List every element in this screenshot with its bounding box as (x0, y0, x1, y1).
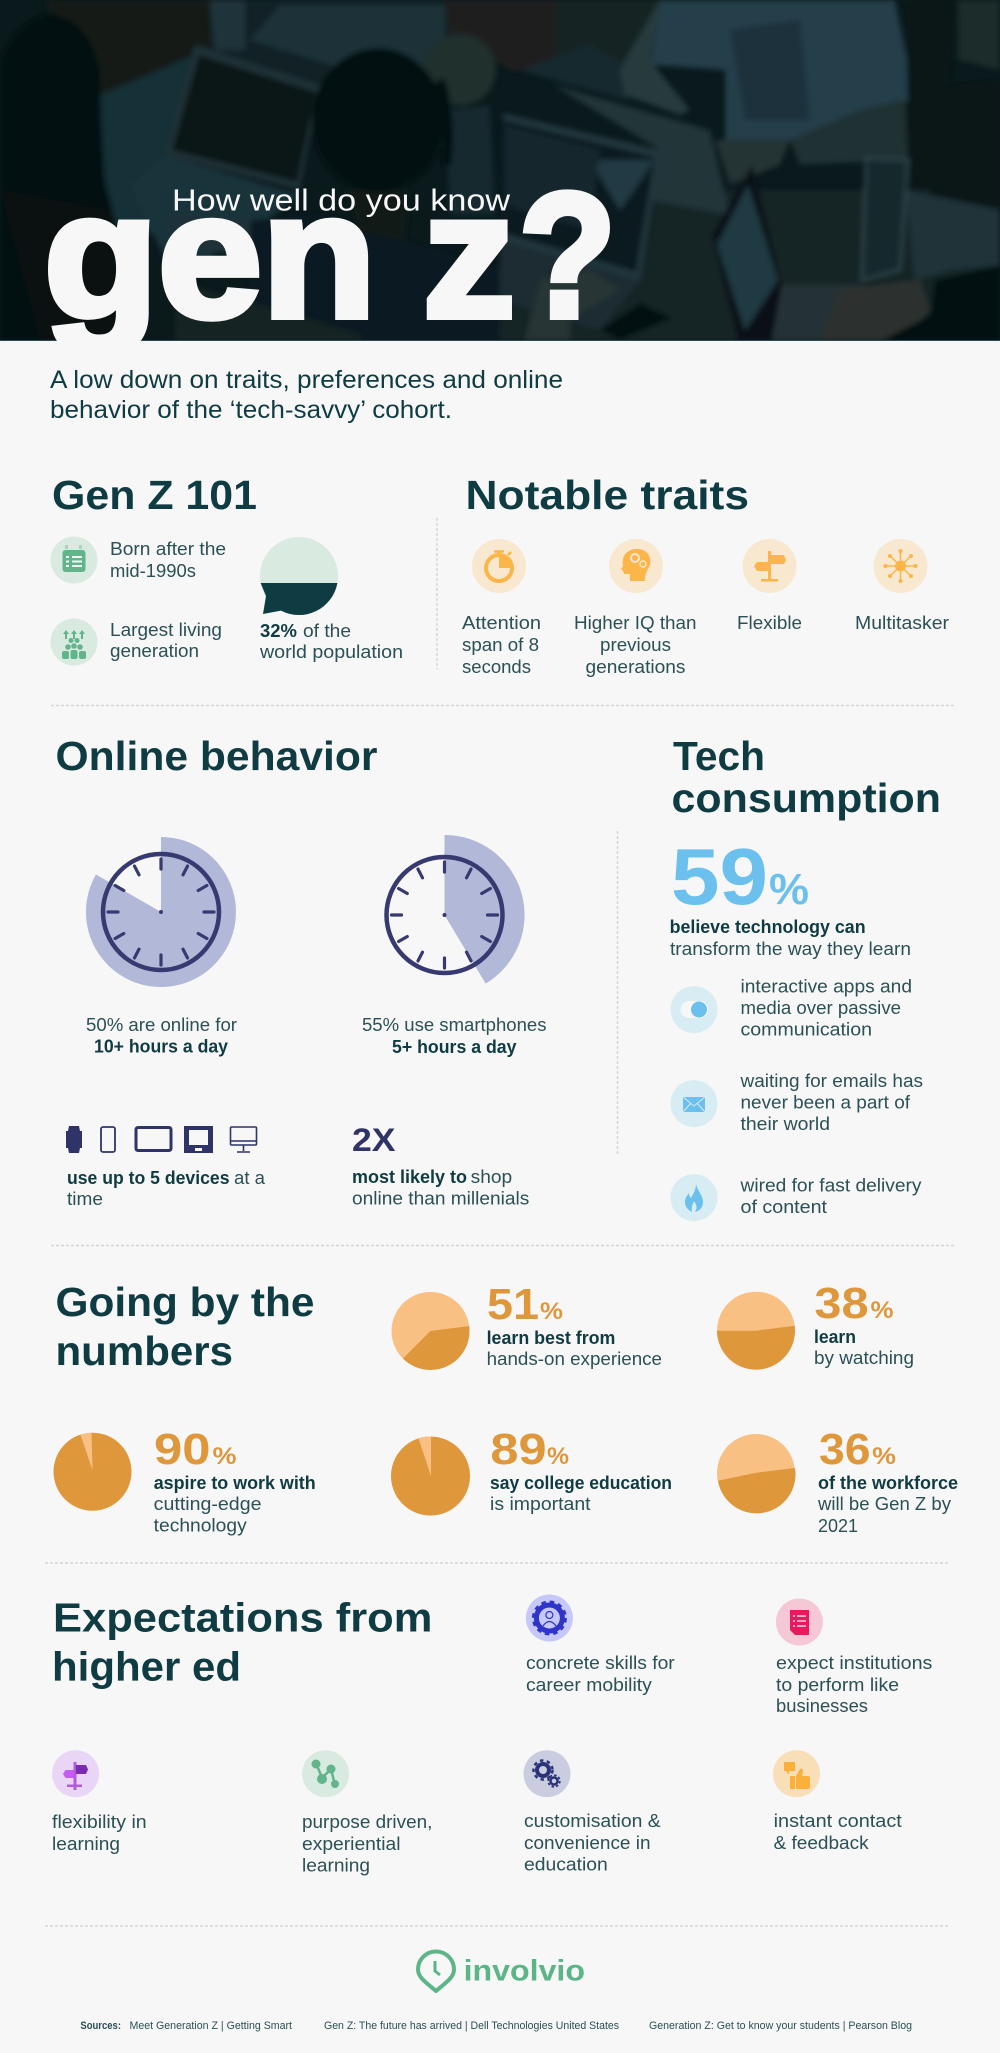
heading: Expectations from higher ed: Expectations from (53, 1595, 432, 1641)
subtitle: behavior of the ‘tech-savvy’ cohort. (50, 396, 452, 424)
heading: Online behavior: Online behavior (56, 733, 378, 779)
text: use up to 5 devices: at a (234, 1167, 266, 1188)
icon: stopwatch (472, 539, 526, 593)
chart: pie 51% (392, 1292, 470, 1370)
text: wired for fast delivery: wired for fast delivery (739, 1174, 922, 1195)
text: 32% of the world population: of the (303, 620, 351, 641)
text: most likely to shop (352, 1166, 529, 1208)
icon: checklist document (776, 1598, 823, 1646)
hero photo (0, 0, 1000, 342)
icon: green nodes (302, 1750, 349, 1797)
heading: Expectations from higher ed (52, 1595, 432, 1690)
stat: 90%: % (212, 1443, 236, 1470)
stat: 38%: learn (814, 1326, 856, 1347)
stat: 51%: learn best from (487, 1327, 615, 1348)
heading: Notable traits: Notable traits (466, 472, 749, 518)
text: interactive apps: interactive apps and (740, 976, 912, 997)
text: largest living: Largest living (110, 619, 222, 640)
text: 55% smartphones: 55% use smartphones (362, 1014, 546, 1035)
stat: 38%: 38 (814, 1279, 869, 1328)
text: born after (110, 538, 226, 581)
stat: 51%: % (540, 1298, 563, 1325)
text: use up to 5 devices: time (67, 1188, 103, 1209)
stat: 36%: 2021 (818, 1515, 858, 1536)
stat: 38%: % (870, 1297, 894, 1324)
icon: head with gears (609, 539, 663, 593)
stat: 89%: % (547, 1443, 569, 1470)
icon: email (670, 1080, 718, 1127)
stat: 38% (814, 1279, 914, 1368)
stat: 90%: 90 (154, 1425, 210, 1474)
stat: 59%: % (769, 865, 809, 914)
icon: purple signpost (52, 1750, 99, 1797)
sources: Gen Z: The future has arrived | Dell Technologies United States (324, 2020, 619, 2032)
heading: Tech consumption: consumption (672, 775, 941, 821)
stat: 59%: 59 (671, 832, 768, 921)
title: z (423, 156, 515, 354)
sources: Generation Z: Get to know your students | Pearson Blog (649, 2020, 912, 2032)
chart: 32% speech bubble (260, 537, 338, 615)
stat: 36%: will be Gen Z by (817, 1493, 952, 1514)
text: 50% online: 50% are online for (86, 1014, 237, 1035)
text: most likely to shop: most likely to (352, 1166, 467, 1187)
text: believe technology (670, 916, 911, 959)
text: most likely to shop: online than millenials (352, 1188, 529, 1208)
text: customisation (524, 1810, 661, 1875)
chart: pie 36% (717, 1434, 796, 1513)
text: waiting for emails: their world (740, 1113, 830, 1134)
text: customisation: education (524, 1854, 608, 1875)
icon: navy gears (524, 1750, 570, 1797)
text: expect institutions: businesses (776, 1695, 868, 1716)
text: higher IQ: Higher IQ than (574, 612, 696, 633)
panel: Tech consumption (670, 733, 941, 1221)
text: instant contact: & feedback (774, 1832, 869, 1853)
stat: 90% (154, 1425, 316, 1536)
text: purpose driven: learning (302, 1855, 370, 1876)
chart: pie 38% (717, 1292, 795, 1370)
chart: clock 55% (386, 835, 525, 984)
text: concrete skills: career mobility (526, 1674, 653, 1695)
icon: flame (670, 1174, 718, 1221)
text: instant contact (774, 1810, 902, 1853)
text: believe technology: transform the way they learn (670, 938, 911, 959)
icon: people (50, 618, 98, 666)
heading: Gen Z 101: Gen Z 101 (52, 472, 257, 518)
title: ? (519, 156, 616, 354)
text: expect institutions: to perform like (776, 1674, 899, 1695)
text: expect institutions (776, 1652, 932, 1716)
icon: signpost (742, 539, 796, 593)
text: 50% online: 10+ hours a day (94, 1036, 229, 1056)
sources: Sources: (80, 2020, 121, 2032)
text: 50% online (86, 1014, 237, 1056)
panel: Expectations from higher ed (52, 1594, 932, 1876)
chart: pie 90% (54, 1433, 132, 1511)
text: largest living: generation (110, 640, 199, 661)
text: waiting for emails (739, 1070, 923, 1134)
stat: 36%: % (872, 1443, 896, 1470)
panel: Notable traits (462, 472, 949, 677)
stat: 90%: aspire to work with (154, 1472, 316, 1493)
heading: Going by the numbers (56, 1279, 314, 1374)
text: interactive apps: media over passive (740, 997, 901, 1018)
stat: 36%: 36 (819, 1425, 870, 1474)
text: customisation: convenience in (524, 1832, 650, 1853)
icon: calendar (50, 536, 98, 584)
chart: clock 50% (86, 837, 236, 987)
icon: devices (66, 1126, 256, 1153)
text: expect institutions: expect institutions (776, 1652, 932, 1673)
title: How well do you know (172, 182, 511, 218)
title (48, 188, 610, 341)
text: higher IQ (574, 612, 696, 677)
text: interactive apps: communication (740, 1019, 872, 1040)
panel: Gen Z 101 (50, 472, 403, 666)
icon: thumbs up (773, 1750, 820, 1797)
subtitle: A low down on traits, preferences and online (50, 366, 563, 394)
text: wired for fast delivery: of content (740, 1196, 827, 1217)
icon: network (874, 539, 928, 593)
heading: Tech consumption (672, 733, 941, 821)
text: attention span (462, 612, 541, 677)
text: use up to 5 devices (67, 1167, 266, 1209)
panel: Going by the numbers (54, 1279, 958, 1536)
text: instant contact: instant contact (774, 1810, 902, 1831)
text: customisation: customisation & (524, 1810, 661, 1831)
text: born after: Born after the (110, 538, 226, 559)
text: largest living (110, 619, 222, 661)
stat: 59% (671, 832, 809, 921)
stat: 38%: by watching (814, 1347, 914, 1368)
text: higher IQ: generations (586, 656, 686, 677)
text: purpose driven: purpose driven, (302, 1811, 432, 1832)
stat: 51%: 51 (487, 1280, 539, 1329)
stat: 2X: 2X (352, 1122, 396, 1158)
text: wired for fast delivery (739, 1174, 922, 1217)
chart: pie 89% (391, 1436, 470, 1516)
text: believe technology: believe technology can (670, 916, 866, 937)
text: 32% of the world population: 32% (260, 620, 297, 641)
heading: Going by the numbers: Going by the (56, 1279, 314, 1325)
text: 32% of the world population (259, 620, 403, 662)
text: flexible: Flexible (737, 612, 802, 633)
text: higher IQ: previous (600, 634, 671, 655)
sources (80, 2020, 912, 2032)
text: attention span: seconds (462, 656, 531, 677)
text: use up to 5 devices: use up to 5 devices (67, 1167, 230, 1188)
text: purpose driven: experiential (302, 1833, 400, 1854)
text: concrete skills (526, 1652, 675, 1695)
stat: 89% (490, 1425, 672, 1514)
stat: 89%: 89 (490, 1425, 547, 1474)
text: attention span: Attention (462, 612, 541, 633)
subtitle (50, 366, 563, 424)
text: interactive apps (740, 976, 912, 1040)
text: attention span: span of 8 (462, 634, 539, 655)
text: flexibility: flexibility in (52, 1811, 147, 1832)
text: flexibility: learning (52, 1833, 120, 1854)
logo: involvio (418, 1952, 585, 1991)
text: waiting for emails: waiting for emails has (739, 1070, 923, 1091)
stat: 36% (817, 1425, 958, 1536)
text: most likely to shop: shop (471, 1166, 512, 1187)
text: waiting for emails: never been a part of (740, 1092, 911, 1113)
stat: 90%: cutting-edge (154, 1493, 262, 1514)
text: born after: mid-1990s (110, 560, 196, 581)
stat: 89%: say college education (490, 1472, 672, 1493)
stat: 51%: hands-on experience (487, 1348, 662, 1369)
title: gen (44, 156, 376, 354)
heading: Expectations from higher ed: higher ed (52, 1644, 241, 1690)
logo: involvio: involvio (464, 1955, 585, 1988)
stat: 51% (487, 1280, 662, 1369)
sources: Meet Generation Z | Getting Smart (130, 2020, 292, 2032)
icon: toggle (670, 986, 718, 1033)
stat: 89%: is important (490, 1493, 591, 1514)
panel: Online behavior (56, 733, 546, 1209)
heading: Going by the numbers: numbers (56, 1328, 233, 1374)
text: purpose driven (302, 1811, 432, 1876)
stat: 90%: technology (154, 1515, 247, 1536)
text: 32% of the world population: world population (259, 641, 403, 662)
stat: 36%: of the workforce (818, 1472, 958, 1493)
text: flexibility (52, 1811, 147, 1854)
text: multitasker: Multitasker (855, 612, 949, 633)
text: 55% smartphones (362, 1014, 546, 1057)
icon: gear with person (526, 1594, 573, 1642)
heading: Tech consumption: Tech (673, 733, 765, 779)
text: 55% smartphones: 5+ hours a day (392, 1036, 517, 1057)
text: concrete skills: concrete skills for (526, 1652, 675, 1673)
